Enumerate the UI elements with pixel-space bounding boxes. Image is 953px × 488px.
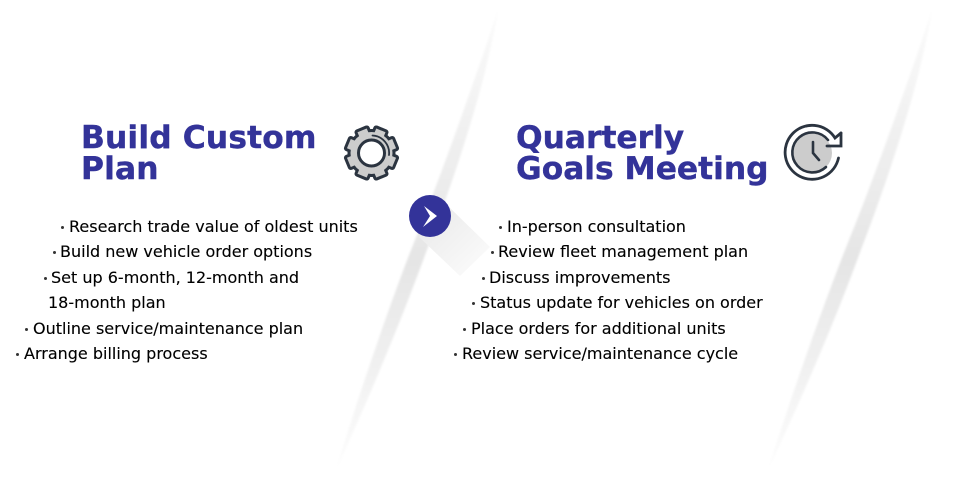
list: Build Custom Plan: Arrange billing process xyxy=(24,344,208,363)
list: Build Custom Plan: Outline service/maintenance plan xyxy=(33,319,303,338)
list: Quarterly Goals Meeting: In-person consultation xyxy=(507,217,686,236)
heading: Quarterly Goals Meeting: Goals Meeting xyxy=(516,151,769,187)
list: Quarterly Goals Meeting: Review fleet management plan xyxy=(498,242,748,261)
heading: Build Custom Plan xyxy=(81,120,317,187)
heading: Build Custom Plan: Plan xyxy=(81,151,159,187)
heading: Build Custom Plan: Build Custom xyxy=(81,120,317,156)
heading: Quarterly Goals Meeting xyxy=(516,120,769,187)
list: Build Custom Plan: 18-month plan xyxy=(48,293,166,312)
list: Build Custom Plan: Research trade value of oldest units xyxy=(69,217,358,236)
list: Quarterly Goals Meeting: Place orders for additional units xyxy=(471,319,726,338)
list: Build Custom Plan: Set up 6-month, 12-month and xyxy=(51,268,299,287)
list: Build Custom Plan: Build new vehicle order options xyxy=(60,242,312,261)
list: Quarterly Goals Meeting: Status update for vehicles on order xyxy=(480,293,763,312)
heading: Quarterly Goals Meeting: Quarterly xyxy=(516,120,684,156)
list: Quarterly Goals Meeting: Discuss improvements xyxy=(489,268,670,287)
list: Quarterly Goals Meeting: Review service/maintenance cycle xyxy=(462,344,738,363)
